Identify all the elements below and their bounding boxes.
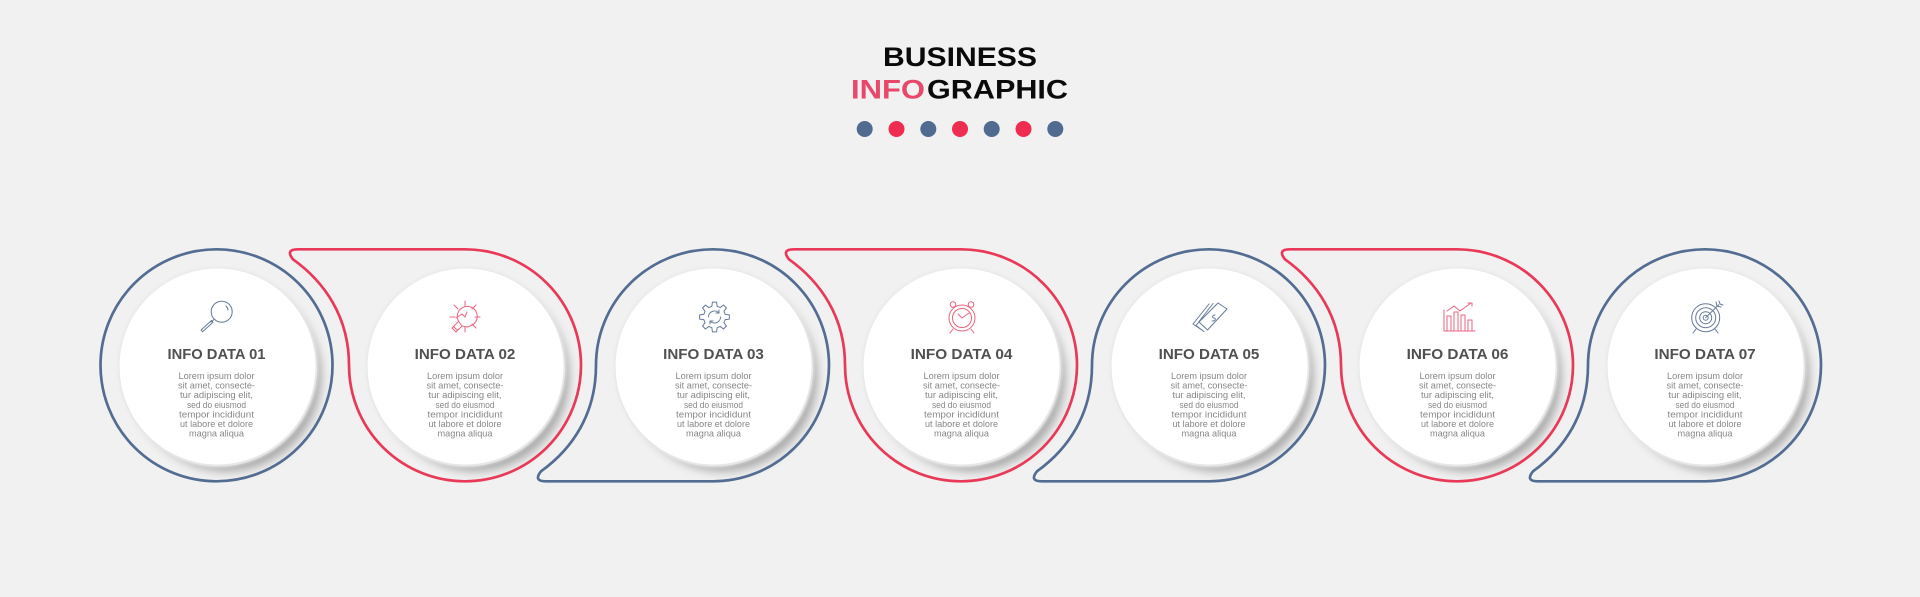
outline: red tailed circle [290,249,581,481]
text block: Lorem ipsum dolor [178,370,254,381]
icon: light bulb [450,301,480,332]
panel: info data 05 [1034,249,1325,481]
text block [1170,370,1248,439]
panel: info data 01 [100,249,332,481]
icon: magnifier [201,301,232,332]
text block: ut labore et dolore [1421,418,1494,429]
heading: INFO DATA 05 [1159,346,1259,363]
outline: blue tailed circle [1530,249,1821,481]
text block: tur adipiscing elit, [925,389,998,400]
text block: tur adipiscing elit, [180,389,253,400]
text block: Lorem ipsum dolor [676,370,752,381]
panel: info data 07 [1530,249,1821,481]
text block: tur adipiscing elit, [1421,389,1494,400]
text block: sit amet, consecte- [923,380,1000,391]
text block: ut labore et dolore [925,418,998,429]
text block: magna aliqua [1430,428,1486,439]
text block: magna aliqua [686,428,742,439]
text block: ut labore et dolore [1172,418,1246,429]
text block: sit amet, consecte- [426,380,504,391]
heading: INFO DATA 04 [911,346,1013,363]
text block: Lorem ipsum dolor [1667,370,1743,381]
text block: tempor incididunt [179,408,254,419]
text block: sed do eiusmod [932,399,991,410]
text block: sed do eiusmod [1676,399,1734,410]
heading: INFO DATA 06 [1407,346,1508,363]
text block [1666,370,1744,439]
text block: tur adipiscing elit, [677,389,750,400]
text block: magna aliqua [1678,428,1733,439]
text block: tempor incididunt [1668,408,1743,419]
text block: sit amet, consecte- [1666,380,1744,391]
icon: alarm clock [949,302,975,333]
heading: INFO DATA 07 [1654,346,1756,363]
icon: bar chart [1444,303,1475,331]
text block: sed do eiusmod [436,399,494,410]
outline: red tailed circle [1282,249,1573,481]
text block: tur adipiscing elit, [1172,389,1246,400]
outline: blue circle [100,249,332,481]
outline: blue tailed circle [1034,249,1325,481]
panel: info data 03 [538,249,829,481]
text block: magna aliqua [1182,428,1237,439]
text block [426,370,504,439]
text block: sit amet, consecte- [1419,380,1496,391]
text block [923,370,1000,439]
dots row [857,121,1063,137]
text block: magna aliqua [438,428,493,439]
text block: tur adipiscing elit, [428,389,502,400]
title [851,42,1068,104]
text block: tempor incididunt [924,408,999,419]
title: GRAPHIC [927,74,1068,104]
panel: info data 06 [1282,249,1573,481]
text block [675,370,752,439]
icon: gear [700,302,729,332]
text block: magna aliqua [934,428,990,439]
title: BUSINESS [883,42,1037,72]
text block: sit amet, consecte- [1170,380,1248,391]
text block: Lorem ipsum dolor [427,370,503,381]
title: INFO [851,74,925,104]
text block: sed do eiusmod [1428,399,1487,410]
text block: Lorem ipsum dolor [924,370,1000,381]
text block: tempor incididunt [1172,408,1247,419]
panel: info data 02 [290,249,581,481]
text block: ut labore et dolore [180,418,253,429]
text block: ut labore et dolore [428,418,502,429]
text block: ut labore et dolore [677,418,750,429]
text block: tempor incididunt [428,408,503,419]
outline: red tailed circle [786,249,1077,481]
panel: info data 04 [786,249,1077,481]
text block: sed do eiusmod [684,399,743,410]
heading: INFO DATA 01 [168,346,266,363]
text block: sit amet, consecte- [675,380,752,391]
text block: tur adipiscing elit, [1668,389,1742,400]
outline: blue tailed circle [538,249,829,481]
icon: banknotes [1193,303,1227,332]
text block: tempor incididunt [1420,408,1495,419]
text block [1419,370,1496,439]
heading: INFO DATA 03 [663,346,764,363]
text block: sed do eiusmod [1180,399,1238,410]
icon: target [1692,301,1723,333]
text block: tempor incididunt [676,408,751,419]
text block: Lorem ipsum dolor [1420,370,1496,381]
heading: INFO DATA 02 [415,346,515,363]
text block: sit amet, consecte- [178,380,255,391]
text block: ut labore et dolore [1668,418,1742,429]
text block: Lorem ipsum dolor [1171,370,1247,381]
text block: sed do eiusmod [187,399,246,410]
text block: magna aliqua [189,428,245,439]
text block [178,370,255,439]
